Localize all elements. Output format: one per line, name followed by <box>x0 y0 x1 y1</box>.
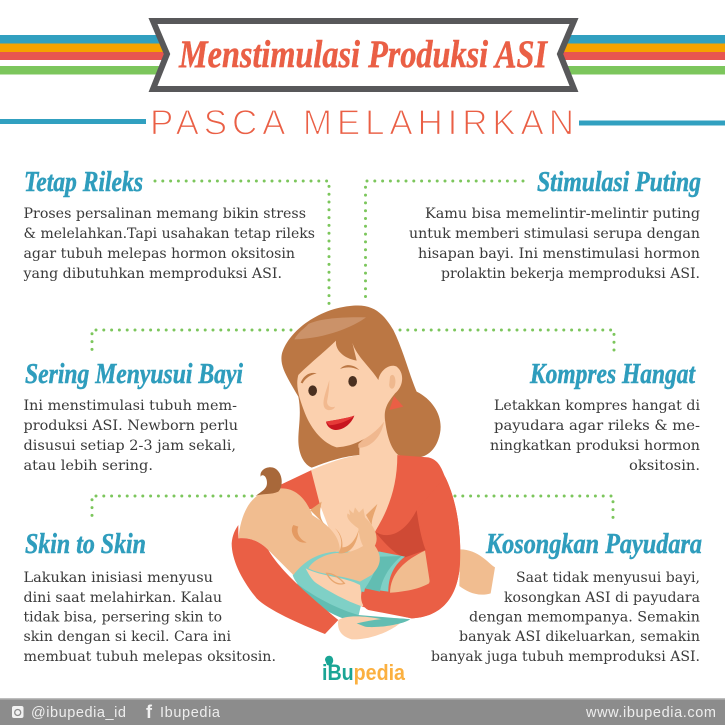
panel: Skin to Skin <box>24 529 276 665</box>
heading: Stimulasi Puting: Stimulasi Puting <box>537 167 701 198</box>
text block: Skin to Skin: tidak bisa, persering skin to <box>24 610 222 626</box>
text block: Tetap Rileks: Proses persalinan memang bikin stress <box>24 206 306 222</box>
text block: Kompres Hangat: oksitosin. <box>629 458 700 474</box>
text block: Skin to Skin <box>24 570 276 665</box>
text block: Stimulasi Puting: prolaktin bekerja memproduksi ASI. <box>441 266 700 282</box>
panel: Sering Menyusui Bayi <box>24 359 243 474</box>
text block: Kompres Hangat: Letakkan kompres hangat di <box>494 398 700 414</box>
panel: Kompres Hangat <box>490 359 700 474</box>
text block: Skin to Skin: Lakukan inisiasi menyusu <box>24 570 213 586</box>
text block: Tetap Rileks: & melelahkan.Tapi usahakan tetap rileks <box>24 226 315 242</box>
mother's head and hair <box>281 305 441 500</box>
heading: Tetap Rileks: Tetap Rileks <box>24 167 143 198</box>
text block: Tetap Rileks: agar tubuh melepas hormon oksitosin <box>24 246 295 262</box>
text block: Stimulasi Puting: untuk memberi stimulasi serupa dengan <box>409 226 700 242</box>
text block: Kosongkan Payudara: kosongkan ASI di payudara <box>504 590 700 606</box>
mother's dress, baby and arms <box>232 455 495 639</box>
subtitle with side rules <box>0 104 725 142</box>
text block: Stimulasi Puting: Kamu bisa memelintir-melintir puting <box>425 206 700 222</box>
subtitle text: PASCA MELAHIRKAN <box>150 104 574 142</box>
text block: Tetap Rileks: yang dibutuhkan memproduksi ASI. <box>23 266 282 282</box>
text block: Kompres Hangat: ningkatkan produksi hormon <box>490 438 700 454</box>
text block: Sering Menyusui Bayi: atau lebih sering. <box>24 458 153 474</box>
text block: Stimulasi Puting <box>409 206 700 282</box>
facebook name: Ibupedia <box>160 705 221 721</box>
text block: Kosongkan Payudara <box>431 570 700 665</box>
text block: Skin to Skin: membuat tubuh melepas oksitosin. <box>24 649 276 665</box>
text block: Skin to Skin: skin dengan si kecil. Cara ini <box>24 629 231 645</box>
text block: Tetap Rileks <box>23 206 315 282</box>
text block: Kompres Hangat <box>490 398 700 474</box>
heading: Sering Menyusui Bayi: Sering Menyusui Bayi <box>25 359 243 390</box>
header colour stripes <box>0 35 725 74</box>
text block: Sering Menyusui Bayi: disusui setiap 2-3 jam sekali, <box>24 438 236 454</box>
text block: Kosongkan Payudara: dengan memompanya. Semakin <box>469 610 700 626</box>
text block: Kosongkan Payudara: banyak ASI dikeluarkan, semakin <box>459 629 700 645</box>
title ribbon <box>153 21 574 89</box>
footer bar <box>0 698 725 725</box>
panel: Kosongkan Payudara <box>431 529 702 665</box>
text block: Skin to Skin: dini saat melahirkan. Kalau <box>24 590 222 606</box>
heading: Skin to Skin: Skin to Skin <box>25 529 146 560</box>
title text: Menstimulasi Produksi ASI <box>178 33 548 76</box>
text block: Sering Menyusui Bayi: produksi ASI. Newborn perlu <box>24 418 238 434</box>
panel: Tetap Rileks <box>23 167 315 282</box>
text block: Sering Menyusui Bayi <box>24 398 238 474</box>
heading: Kompres Hangat: Kompres Hangat <box>529 359 696 390</box>
dotted connector lines <box>92 181 614 520</box>
text block: Kosongkan Payudara: banyak juga tubuh memproduksi ASI. <box>431 649 700 665</box>
icon: facebook: f <box>146 702 153 722</box>
logo: iBupedia: iBupedia <box>322 660 406 685</box>
text block: Stimulasi Puting: hisapan bayi. Ini menstimulasi hormon <box>418 246 700 262</box>
icon: instagram <box>12 706 24 718</box>
text block: Kompres Hangat: payudara agar rileks & me- <box>494 418 700 434</box>
text block: Sering Menyusui Bayi: Ini menstimulasi tubuh mem- <box>24 398 237 414</box>
text block: Kosongkan Payudara: Saat tidak menyusui bayi, <box>516 570 700 586</box>
illustration: mother and baby <box>232 305 495 639</box>
instagram handle: @ibupedia_id <box>31 705 126 721</box>
website: www.ibupedia.com <box>585 705 716 721</box>
panel: Stimulasi Puting <box>409 167 701 282</box>
